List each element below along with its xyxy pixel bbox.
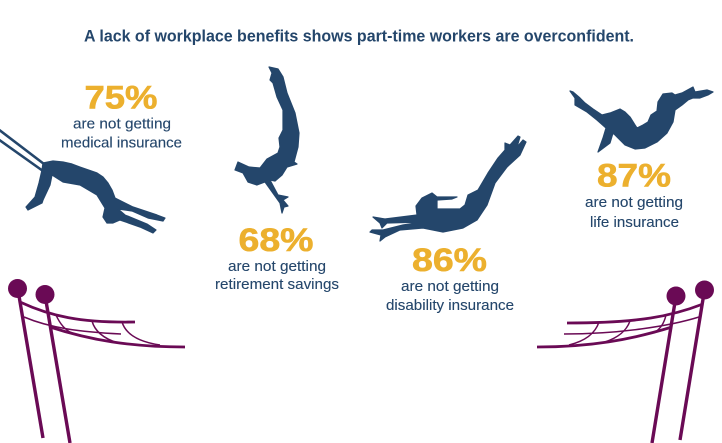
right platform and poles — [537, 280, 714, 443]
stat: 75% medical insurance — [61, 80, 182, 152]
acrobat 1 on trapeze — [0, 129, 165, 233]
stat: 68% retirement savings: are not getting — [228, 259, 326, 275]
acrobat 4 tucked — [570, 87, 713, 152]
stat: 86% disability insurance: disability insurance — [386, 298, 514, 314]
left platform and poles — [8, 279, 185, 443]
stat: 68% retirement savings — [215, 222, 339, 293]
acrobat 3 arched — [370, 136, 526, 241]
stat: 68% retirement savings: retirement savings — [215, 277, 339, 293]
title: A lack of workplace benefits shows part-time workers are overconfident. — [84, 28, 634, 46]
stat: 75% medical insurance: 75% — [84, 80, 158, 116]
stat: 87% life insurance: 87% — [597, 158, 671, 194]
stat: 75% medical insurance: medical insurance — [61, 136, 182, 152]
acrobat 2 diving — [235, 67, 299, 213]
stat: 86% disability insurance: are not getting — [401, 279, 499, 295]
stat: 87% life insurance: life insurance — [590, 215, 679, 231]
stat: 68% retirement savings: 68% — [238, 222, 314, 258]
stat: 75% medical insurance: are not getting — [73, 116, 171, 132]
stat: 87% life insurance — [585, 158, 683, 231]
stat: 86% disability insurance: 86% — [412, 242, 487, 278]
stat: 87% life insurance: are not getting — [585, 195, 683, 211]
stat: 86% disability insurance — [386, 242, 514, 314]
